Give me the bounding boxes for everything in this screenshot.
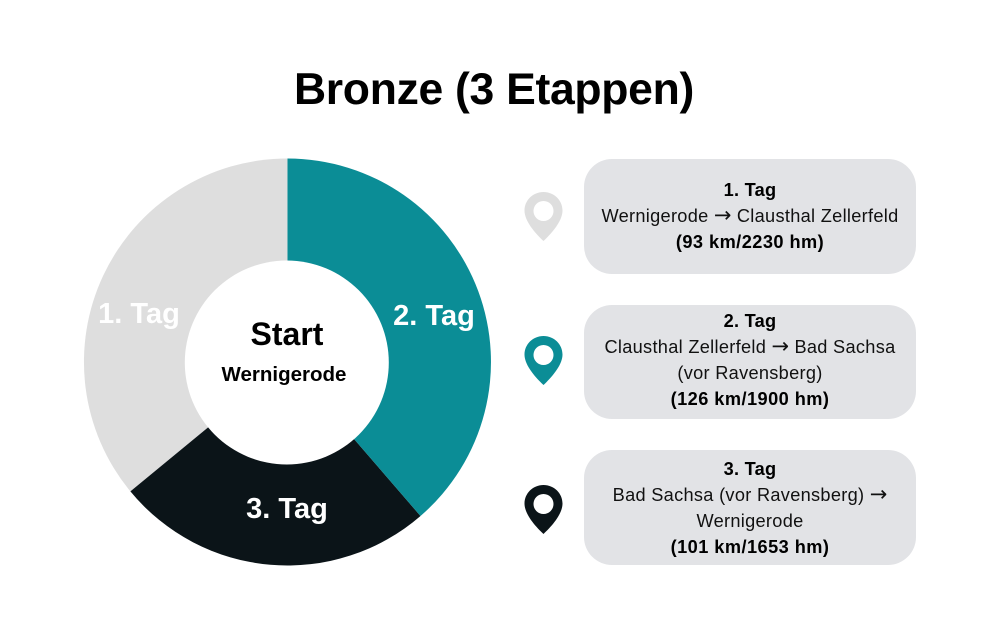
title: Bronze (3 Etappen) [294,65,694,114]
panel: 1. Tag: 1. Tag [724,180,776,200]
panel: 3. Tag: Wernigerode [696,511,804,531]
panel: 2. Tag: Clausthal Zellerfeld → Bad Sachsa [604,334,896,358]
segment: 3. Tag [130,362,420,566]
donut chart [84,158,491,566]
icon: grey location pin [524,192,562,241]
label: 2. Tag: 2. Tag [393,300,475,332]
panel: 2. Tag: (vor Ravensberg) [677,363,823,383]
panel: 3. Tag [584,450,916,565]
panel: 2. Tag [584,305,916,419]
panel: 1. Tag [584,159,916,274]
icon: black location pin [524,485,562,534]
panel: 2. Tag: 2. Tag [724,311,776,331]
icon: teal location pin [524,336,562,385]
label: 1. Tag: 1. Tag [98,298,180,330]
center label: Start: Start [251,316,324,352]
center label: Wernigerode: Wernigerode [222,363,346,386]
panel: 3. Tag: (101 km/1653 hm) [671,537,829,557]
panel: 1. Tag: (93 km/2230 hm) [676,232,824,252]
segment: 1. Tag [84,158,288,491]
donut hole [185,260,389,464]
label: 3. Tag: 3. Tag [246,493,328,525]
panel: 3. Tag: 3. Tag [724,459,776,479]
segment: 2. Tag [288,158,491,516]
panel: 3. Tag: Bad Sachsa (vor Ravensberg) → [613,482,887,506]
panel: 1. Tag: Wernigerode → Clausthal Zellerfeld [601,202,899,226]
panel: 2. Tag: (126 km/1900 hm) [671,389,829,409]
